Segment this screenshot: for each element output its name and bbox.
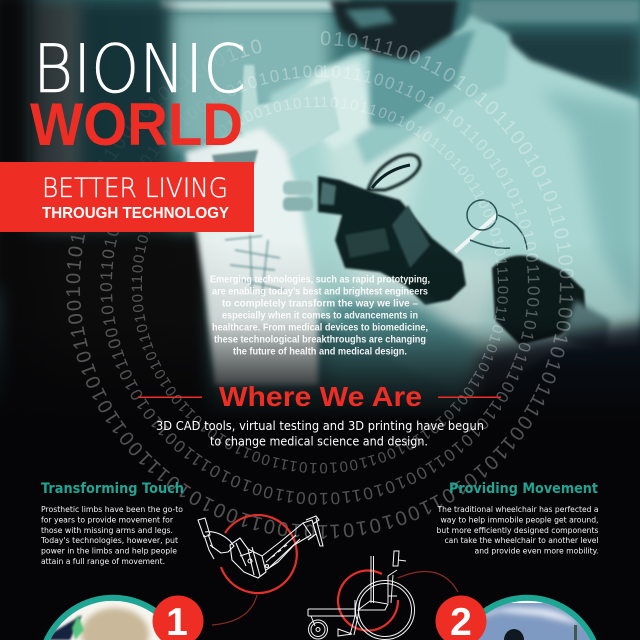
- neck and beard: [370, 30, 475, 125]
- panel: Providing Movement text: can take the wheelchair to another level: [444, 536, 598, 545]
- panel: Providing Movement text: but more efficiently designed components: [436, 526, 598, 535]
- collar: [350, 15, 510, 165]
- title word: BIONIC: BIONIC: [33, 30, 246, 108]
- glove: [492, 256, 586, 345]
- subtitle: 3D CAD tools, virtual testing and 3D printing have begun: [156, 419, 484, 433]
- panel: Transforming Touch text: Today's technologies, however, put: [40, 536, 178, 545]
- badge: number 1: [152, 595, 204, 640]
- binary code rings: 01011100110101011001010110100110010101110011010101100101011010011001010111001101010110010101101001100101011100110: [66, 31, 574, 539]
- photo circle 2: [478, 594, 596, 640]
- intro paragraph: the future of health and medical design.: [233, 346, 407, 358]
- panel: Transforming Touch text: those with missing arms and legs.: [41, 526, 173, 535]
- red banner: BETTER LIVING: [42, 173, 228, 204]
- connector: wheelchair to number 2: [398, 572, 458, 592]
- prosthetic wire and rod: [455, 214, 498, 252]
- panel: Providing Movement text: [436, 481, 599, 556]
- icon: wheelchair in red ring: [308, 551, 414, 640]
- robotic hand: [283, 155, 466, 305]
- panel: Transforming Touch text: [40, 481, 184, 566]
- panel: Transforming Touch text: power in the limbs and help people: [41, 546, 177, 556]
- heading: Where We Are: Where We Are: [219, 381, 422, 412]
- raised hand fingers: [240, 65, 340, 170]
- panel: Providing Movement text: way to help immobile people get around,: [440, 516, 598, 524]
- panel: Transforming Touch text: for years to provide movement for: [41, 516, 174, 524]
- intro paragraph: these technological breakthroughs are changing: [214, 334, 426, 346]
- subtitle: to change medical science and design.: [210, 434, 428, 448]
- shirt: [270, 25, 640, 400]
- intro paragraph: especially when it comes to advancements in: [222, 310, 418, 322]
- badge: number 2: [436, 595, 487, 640]
- intro paragraph: healthcare. From medical devices to biomedicine,: [212, 322, 428, 334]
- connector: arm to number 1: [212, 595, 257, 625]
- red banner: [0, 162, 254, 232]
- intro paragraph: [210, 274, 430, 358]
- panel: Providing Movement text: Providing Movement: [449, 481, 598, 497]
- red banner: THROUGH TECHNOLOGY: [42, 205, 229, 222]
- intro paragraph: to completely transform the way we live –: [222, 298, 418, 310]
- panel: Providing Movement text: The traditional wheelchair has perfected a: [437, 505, 599, 514]
- photo circle 1: [44, 594, 161, 640]
- title word: WORLD: WORLD: [30, 91, 243, 158]
- panel: Providing Movement text: and provide even more mobility.: [474, 546, 598, 556]
- lower arm shadow: [330, 300, 480, 410]
- white cast arm: [185, 128, 318, 385]
- intro paragraph: are enabling today's best and brightest engineers: [212, 286, 428, 298]
- panel: Transforming Touch text: Prosthetic limbs have been the go-to: [41, 505, 183, 514]
- panel: Transforming Touch text: attain a full range of movement.: [41, 557, 165, 566]
- icon: robotic arm in red ring: [198, 515, 323, 593]
- panel: Transforming Touch text: Transforming Touch: [41, 481, 184, 497]
- intro paragraph: Emerging technologies, such as rapid prototyping,: [210, 274, 430, 286]
- subtitle: [156, 419, 484, 448]
